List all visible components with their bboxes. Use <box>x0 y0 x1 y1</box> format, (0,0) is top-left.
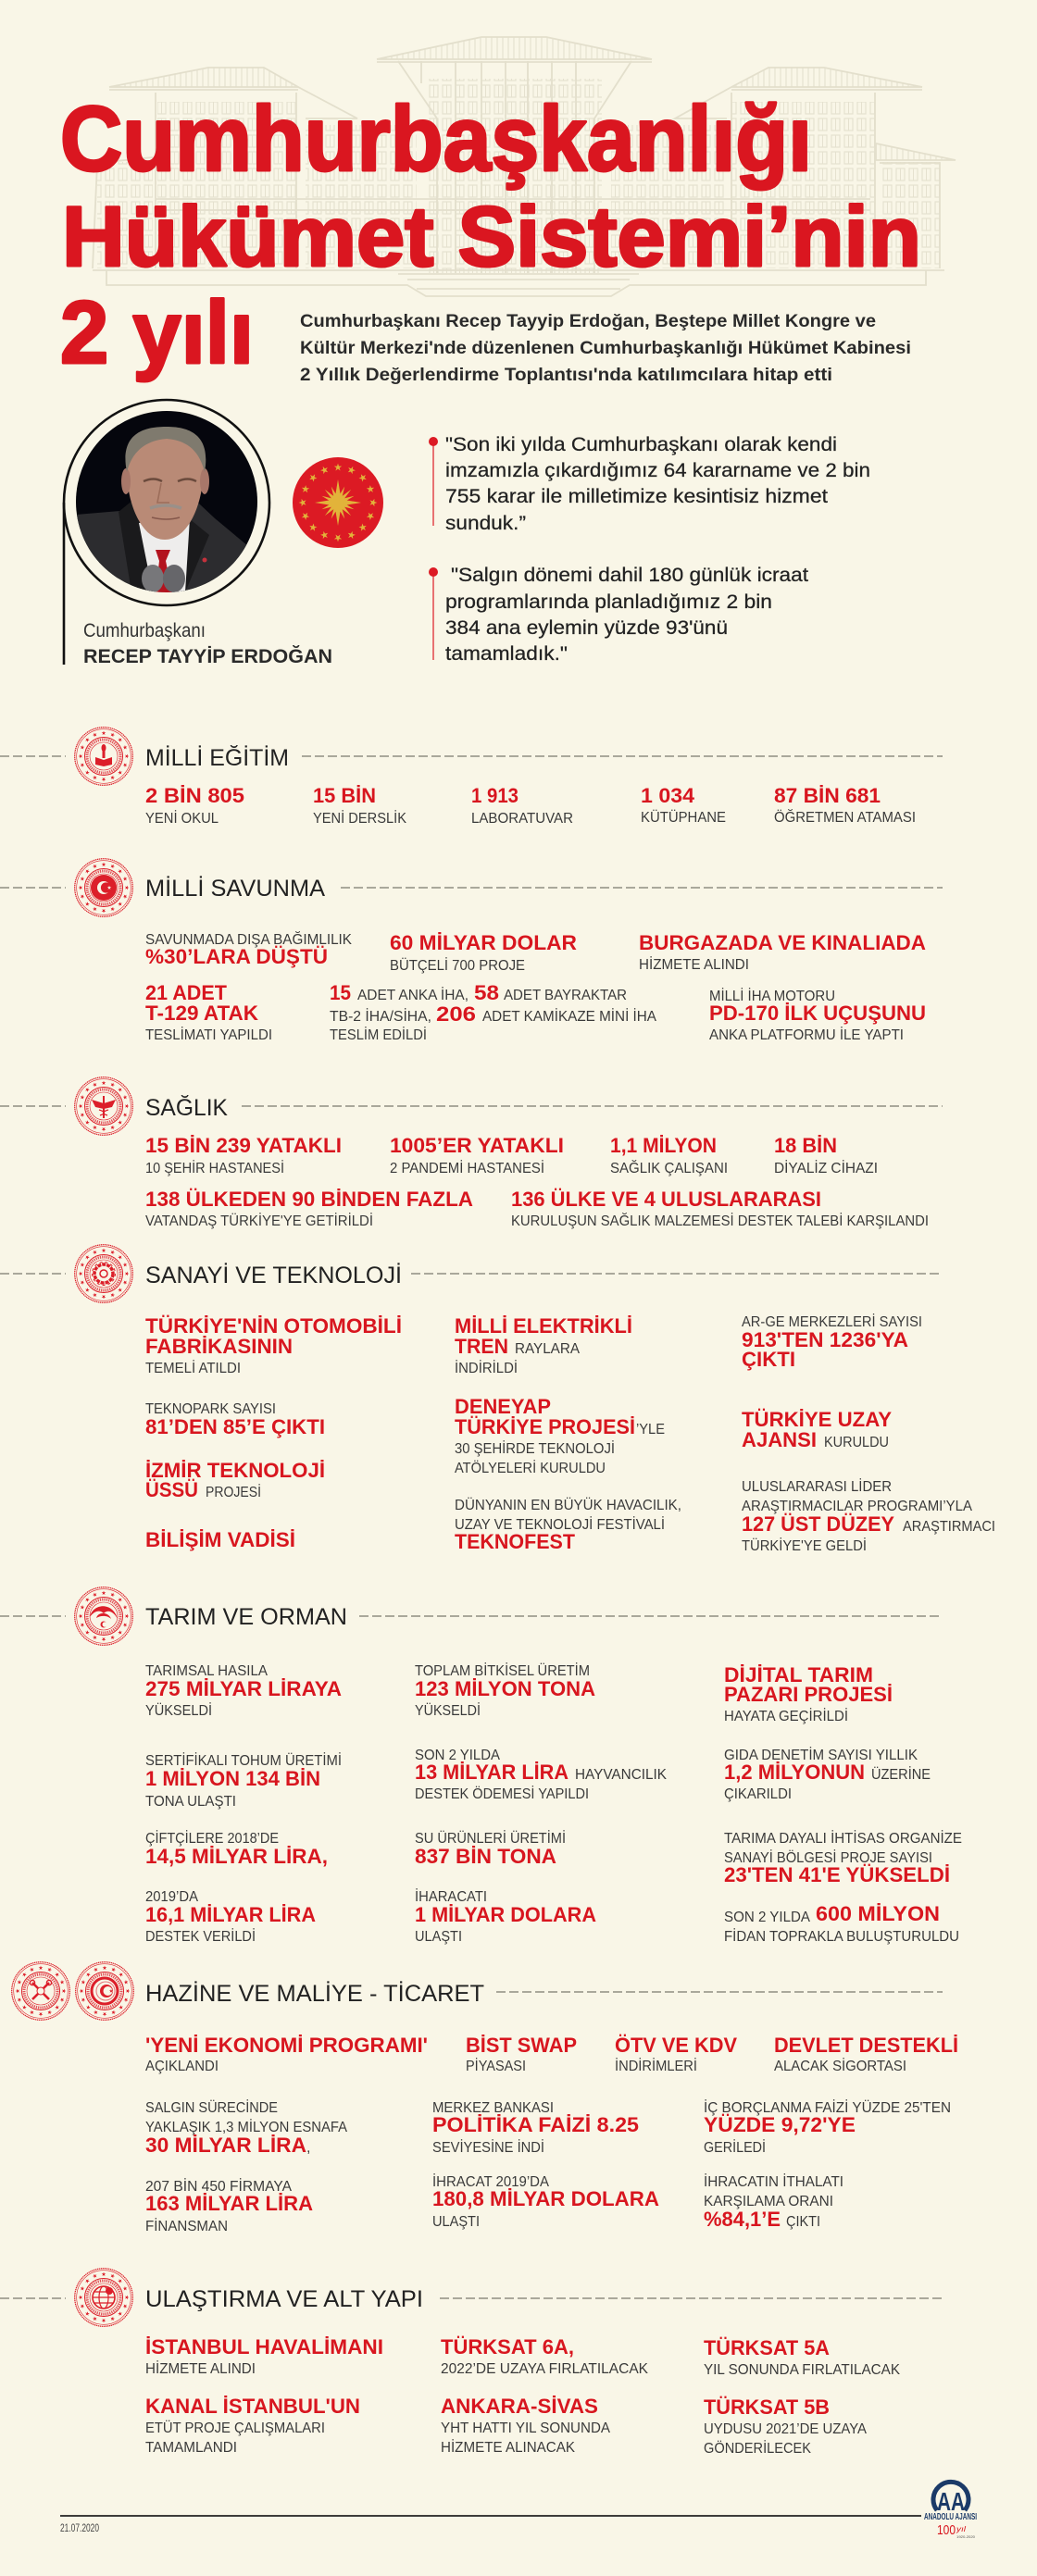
item: crop production <box>415 1661 595 1719</box>
footer rule <box>60 2515 921 2517</box>
item: space agency: KURULDU <box>824 1435 889 1450</box>
item: exports: 180,8 MİLYAR DOLARA <box>432 2187 659 2210</box>
item: fishery export: İHARACATI <box>415 1887 487 1905</box>
item: electric train: TREN <box>455 1335 508 1358</box>
item: researchers: ULUSLARARASI LİDER <box>742 1477 892 1495</box>
item: economy programme: 'YENİ EKONOMİ PROGRAMI' <box>145 2034 428 2057</box>
item: electric train: İNDİRİLDİ <box>455 1359 518 1376</box>
item: policy rate: SEVİYESİNE İNDİ <box>432 2138 544 2156</box>
item: livestock support: DESTEK ÖDEMESİ YAPILDI <box>415 1785 589 1802</box>
stat: laboratories: 1 913 <box>471 784 518 807</box>
stat: medical supplies <box>511 1188 929 1229</box>
logo: anadolu ajansı: 1920-2020 <box>956 2534 976 2539</box>
icon: industry ministry seal <box>75 1245 132 1302</box>
item: researchers: TÜRKİYE'YE GELDİ <box>742 1537 867 1554</box>
heading: ULAŞTIRMA VE ALT YAPI <box>145 2286 423 2312</box>
stat: 60 billion: BÜTÇELİ 700 PROJE <box>390 956 525 974</box>
stat: drones: ADET ANKA İHA, <box>357 986 469 1003</box>
item: credit insurance: ALACAK SİGORTASI <box>774 2057 906 2074</box>
stat: engine: MİLLİ İHA MOTORU <box>709 987 835 1004</box>
quote one: 755 karar ile milletimize kesintisiz hizmet <box>445 486 828 507</box>
stat: city hospitals <box>145 1134 342 1176</box>
item: organized zones: SANAYİ BÖLGESİ PROJE SAYISI <box>724 1848 932 1866</box>
item: tradesmen support: YAKLAŞIK 1,3 MİLYON ESNAFA <box>145 2118 347 2135</box>
item: exports: İHRACAT 2019’DA <box>432 2172 549 2190</box>
item: türksat 5b: UYDUSU 2021’DE UZAYA <box>704 2421 867 2437</box>
item: fishery export <box>415 1887 596 1945</box>
item: ankara-sivas: HİZMETE ALINACAK <box>441 2438 575 2456</box>
item: borrowing rate <box>704 2098 951 2156</box>
item: canal: KANAL İSTANBUL'UN <box>145 2395 360 2418</box>
item: exports <box>432 2172 659 2230</box>
item: saplings: SON 2 YILDA <box>724 1910 810 1925</box>
item: türksat 5a: TÜRKSAT 5A <box>704 2336 830 2359</box>
item: deneyap: ’YLE <box>636 1422 665 1437</box>
item: izmir base: ÜSSÜ <box>145 1478 198 1501</box>
date: 21.07.2020 <box>60 2521 99 2534</box>
quote two: "Salgın dönemi dahil 180 günlük icraat <box>451 565 808 586</box>
stat: pandemic hospitals: 1005’ER YATAKLI <box>390 1134 564 1157</box>
item: exports: ULAŞTI <box>432 2214 480 2230</box>
item: organized zones <box>724 1829 962 1886</box>
stat: laboratories: LABORATUVAR <box>471 811 573 827</box>
item: technoparks <box>145 1401 325 1438</box>
stat: teachers <box>774 784 916 826</box>
portrait of the president <box>64 400 269 665</box>
item: tradesmen support: SALGIN SÜRECİNDE <box>145 2098 278 2116</box>
stat: citizens returned <box>145 1188 473 1229</box>
item: livestock support: HAYVANCILIK <box>575 1767 667 1783</box>
president name <box>83 620 332 667</box>
item: airport <box>145 2335 383 2377</box>
item: fishery export: 1 MİLYAR DOLARA <box>415 1903 596 1926</box>
panel: hazine ve maliye - ticaret <box>12 1962 958 2234</box>
item: swap: BİST SWAP <box>466 2034 577 2057</box>
item: fishery production: 837 BİN TONA <box>415 1845 556 1868</box>
item: farmer support 2019: 16,1 MİLYAR LİRA <box>145 1903 316 1926</box>
item: seeds: SERTİFİKALI TOHUM ÜRETİMİ <box>145 1751 342 1769</box>
stat: t-129: 21 ADET <box>145 981 228 1004</box>
item: saplings: 600 MİLYON <box>816 1902 940 1925</box>
logo: anadolu ajansı: yıl <box>956 2525 966 2533</box>
title: Hükümet Sistemi’nin <box>62 190 921 284</box>
item: farmer support 2019: DESTEK VERİLDİ <box>145 1927 256 1945</box>
item: food inspections <box>724 1746 931 1802</box>
icon: transport ministry seal <box>75 2269 132 2326</box>
item: export coverage: KARŞILAMA ORANI <box>704 2194 833 2209</box>
icon: presidential seal <box>293 457 383 548</box>
item: technoparks: TEKNOPARK SAYISI <box>145 1401 276 1417</box>
item: firm financing: 163 MİLYAR LİRA <box>145 2192 313 2215</box>
item: economy programme <box>145 2034 428 2074</box>
panel: milli savunma <box>0 859 943 1043</box>
stat: dialysis: DİYALİZ CİHAZI <box>774 1159 878 1176</box>
item: policy rate <box>432 2100 639 2156</box>
stat: engine: ANKA PLATFORMU İLE YAPTI <box>709 1026 904 1043</box>
item: organized zones: TARIMA DAYALI İHTİSAS ORGANİZE <box>724 1829 962 1847</box>
item: firm financing: 207 BİN 450 FİRMAYA <box>145 2177 292 2195</box>
item: food inspections: ÜZERİNE <box>871 1765 931 1783</box>
item: electric train: MİLLİ ELEKTRİKLİ <box>455 1314 632 1338</box>
item: crop production: 123 MİLYON TONA <box>415 1677 595 1700</box>
quote one: sunduk.” <box>445 513 526 534</box>
subtitle text <box>300 312 911 385</box>
item: livestock support <box>415 1748 667 1802</box>
item: digital market <box>724 1663 893 1724</box>
stat: drones: 58 <box>474 981 499 1004</box>
item: farmer support 2019: 2019’DA <box>145 1889 198 1905</box>
item: car factory <box>145 1314 402 1376</box>
item: researchers: ARAŞTIRMACI <box>903 1519 995 1535</box>
item: ankara-sivas: ANKARA-SİVAS <box>441 2395 598 2418</box>
quote one: "Son iki yılda Cumhurbaşkanı olarak kendi <box>445 434 837 455</box>
stat: drones: 15 <box>330 981 351 1004</box>
item: borrowing rate: İÇ BORÇLANMA FAİZİ YÜZDE 25'TEN <box>704 2098 951 2116</box>
item: izmir base: İZMİR TEKNOLOJİ <box>145 1459 325 1482</box>
item: export coverage <box>704 2172 843 2231</box>
item: teknofest: TEKNOFEST <box>455 1530 576 1553</box>
item: deneyap: 30 ŞEHİRDE TEKNOLOJİ <box>455 1439 615 1457</box>
item: canal: ETÜT PROJE ÇALIŞMALARI <box>145 2420 325 2436</box>
item: economy programme: AÇIKLANDI <box>145 2059 219 2074</box>
item: türksat 6a: 2022’DE UZAYA FIRLATILACAK <box>441 2361 648 2377</box>
stat: drones: TB-2 İHA/SİHA, <box>330 1007 431 1025</box>
panel: ulaştırma ve alt yapı <box>0 2269 943 2457</box>
item: türksat 6a <box>441 2335 648 2377</box>
quote one <box>429 434 870 534</box>
stat: libraries <box>641 784 726 826</box>
stat: ships: BURGAZADA VE KINALIADA <box>639 931 926 954</box>
president name: RECEP TAYYİP ERDOĞAN <box>83 645 332 667</box>
panel: milli eğitim <box>0 728 943 827</box>
item: izmir base <box>145 1459 325 1501</box>
item: airport: HİZMETE ALINDI <box>145 2359 256 2377</box>
item: deneyap: DENEYAP <box>455 1395 551 1418</box>
item: digital market: DİJİTAL TARIM <box>724 1663 873 1686</box>
stat: new schools <box>145 784 244 827</box>
item: fishery production: SU ÜRÜNLERİ ÜRETİMİ <box>415 1829 566 1847</box>
logo: anadolu ajansı: AA <box>937 2487 965 2516</box>
illustration: presidential complex building <box>93 37 956 296</box>
title: 2 yılı <box>60 283 254 382</box>
stat: t-129 <box>145 981 272 1043</box>
item: researchers <box>742 1477 995 1554</box>
icon: trade ministry seal <box>76 1962 133 2020</box>
item: revenue: 275 MİLYAR LİRAYA <box>145 1677 342 1700</box>
stat: health workers: SAĞLIK ÇALIŞANI <box>610 1159 728 1176</box>
item: tax cuts: ÖTV VE KDV <box>615 2034 737 2057</box>
stat: dialysis <box>774 1134 878 1176</box>
item: farmer support 2018: ÇİFTÇİLERE 2018’DE <box>145 1829 279 1847</box>
icon: treasury ministry seal <box>12 1962 69 2020</box>
item: crop production: TOPLAM BİTKİSEL ÜRETİM <box>415 1661 590 1679</box>
item: swap <box>466 2034 577 2074</box>
item: airport: İSTANBUL HAVALİMANI <box>145 2335 383 2358</box>
stat: dialysis: 18 BİN <box>774 1134 837 1157</box>
item: türksat 5a <box>704 2336 900 2378</box>
item: tradesmen support <box>145 2098 347 2157</box>
item: seeds: 1 MİLYON 134 BİN <box>145 1767 320 1790</box>
stat: dependence: SAVUNMADA DIŞA BAĞIMLILIK <box>145 930 352 948</box>
heading: TARIM VE ORMAN <box>145 1604 347 1630</box>
item: export coverage: ÇIKTI <box>786 2214 820 2230</box>
item: digital market: PAZARI PROJESİ <box>724 1683 893 1706</box>
item: deneyap: ATÖLYELERİ KURULDU <box>455 1459 606 1476</box>
stat: engine <box>709 987 926 1043</box>
item: livestock support: 13 MİLYAR LİRA <box>415 1761 568 1784</box>
item: space agency: TÜRKİYE UZAY <box>742 1408 892 1431</box>
item: technoparks: 81’DEN 85’E ÇIKTI <box>145 1415 325 1438</box>
stat: medical supplies: 136 ÜLKE VE 4 ULUSLARARASI <box>511 1188 821 1211</box>
heading: SANAYİ VE TEKNOLOJİ <box>145 1262 402 1288</box>
item: food inspections: ÇIKARILDI <box>724 1786 792 1802</box>
item: teknofest <box>455 1497 681 1553</box>
stat: dependence: %30’LARA DÜŞTÜ <box>145 945 328 968</box>
item: export coverage: İHRACATIN İTHALATI <box>704 2172 843 2190</box>
item: canal <box>145 2395 360 2456</box>
item: deneyap <box>455 1395 665 1476</box>
item: fishery production <box>415 1829 566 1868</box>
item: car factory: TÜRKİYE'NİN OTOMOBİLİ <box>145 1314 402 1338</box>
stat: drones: ADET BAYRAKTAR <box>504 988 627 1003</box>
item: saplings: FİDAN TOPRAKLA BULUŞTURULDU <box>724 1927 959 1945</box>
panel: tarım ve orman <box>0 1587 962 1945</box>
item: tax cuts <box>615 2034 737 2074</box>
stat: dependence <box>145 930 352 968</box>
item: firm financing <box>145 2177 313 2234</box>
logo: anadolu ajansı: ANADOLU AJANSI <box>924 2512 977 2522</box>
item: r and d centers: ÇIKTI <box>742 1348 795 1371</box>
icon: agriculture ministry seal <box>75 1587 132 1645</box>
panel: sanayi ve teknoloji <box>0 1245 995 1554</box>
stat: pandemic hospitals: 2 PANDEMİ HASTANESİ <box>390 1159 544 1176</box>
stat: ships <box>639 931 926 973</box>
stat: teachers: 87 BİN 681 <box>774 784 881 807</box>
item: teknofest: DÜNYANIN EN BÜYÜK HAVACILIK, <box>455 1497 681 1513</box>
item: space agency: AJANSI <box>742 1428 817 1451</box>
stat: 60 billion: 60 MİLYAR DOLAR <box>390 931 577 954</box>
item: swap: PİYASASI <box>466 2057 526 2074</box>
stat: laboratories <box>471 784 573 827</box>
item: r and d centers: AR-GE MERKEZLERİ SAYISI <box>742 1313 922 1330</box>
stat: citizens returned: 138 ÜLKEDEN 90 BİNDEN FAZLA <box>145 1188 473 1211</box>
stat: new schools: 2 BİN 805 <box>145 784 244 807</box>
stat: drones: 206 <box>436 1002 476 1026</box>
item: credit insurance <box>774 2034 958 2074</box>
item: tradesmen support: , <box>306 2140 310 2156</box>
stat: ships: HİZMETE ALINDI <box>639 955 749 973</box>
item: car factory: FABRİKASININ <box>145 1335 293 1358</box>
item: export coverage: %84,1’E <box>704 2208 781 2231</box>
quote two: programlarında planladığımız 2 bin <box>445 591 772 613</box>
item: livestock support: SON 2 YILDA <box>415 1748 500 1763</box>
heading: SAĞLIK <box>145 1094 228 1121</box>
item: food inspections: GIDA DENETİM SAYISI YILLIK <box>724 1746 918 1763</box>
item: farmer support 2018 <box>145 1829 328 1868</box>
title <box>60 87 921 382</box>
heading: MİLLİ EĞİTİM <box>145 744 289 771</box>
quote two: 384 ana eylemin yüzde 93'ünü <box>445 617 728 639</box>
quote one: imzamızla çıkardığımız 64 kararname ve 2 bin <box>445 460 870 481</box>
item: electric train: RAYLARA <box>515 1341 580 1357</box>
item: researchers: ARAŞTIRMACILAR PROGRAMI’YLA <box>742 1499 972 1514</box>
item: space agency <box>742 1408 892 1451</box>
item: revenue: YÜKSELDİ <box>145 1701 212 1719</box>
stat: medical supplies: KURULUŞUN SAĞLIK MALZEMESİ DESTEK TALEBİ KARŞILANDI <box>511 1212 929 1229</box>
president name: Cumhurbaşkanı <box>83 620 206 641</box>
item: revenue: TARIMSAL HASILA <box>145 1663 268 1679</box>
stat: engine: PD-170 İLK UÇUŞUNU <box>709 1002 926 1025</box>
item: revenue <box>145 1663 342 1719</box>
item: türksat 5b: TÜRKSAT 5B <box>704 2396 830 2419</box>
item: borrowing rate: YÜZDE 9,72'YE <box>704 2113 856 2136</box>
item: seeds <box>145 1751 342 1810</box>
title: Cumhurbaşkanlığı <box>60 87 812 190</box>
stat: t-129: TESLİMATI YAPILDI <box>145 1026 272 1043</box>
icon: defence ministry seal <box>75 859 132 916</box>
stat: new schools: YENİ OKUL <box>145 809 219 827</box>
item: policy rate: MERKEZ BANKASI <box>432 2100 554 2116</box>
stat: health workers: 1,1 MİLYON <box>610 1134 717 1157</box>
item: izmir base: PROJESİ <box>206 1483 261 1500</box>
stat: new classrooms <box>313 784 406 827</box>
item: ankara-sivas <box>441 2395 610 2456</box>
stat: city hospitals: 10 ŞEHİR HASTANESİ <box>145 1159 284 1176</box>
stat: libraries: KÜTÜPHANE <box>641 809 726 826</box>
stat: drones: ADET KAMİKAZE MİNİ İHA <box>482 1007 656 1025</box>
heading: MİLLİ SAVUNMA <box>145 875 325 902</box>
stat: libraries: 1 034 <box>641 784 695 807</box>
item: farmer support 2019 <box>145 1889 316 1945</box>
item: seeds: TONA ULAŞTI <box>145 1794 236 1810</box>
item: r and d centers: 913'TEN 1236'YA <box>742 1328 908 1351</box>
heading: HAZİNE VE MALİYE - TİCARET <box>145 1980 484 2007</box>
item: organized zones: 23'TEN 41'E YÜKSELDİ <box>724 1863 950 1886</box>
item: car factory: TEMELİ ATILDI <box>145 1359 241 1376</box>
stat: t-129: T-129 ATAK <box>145 1002 258 1025</box>
stat: city hospitals: 15 BİN 239 YATAKLI <box>145 1134 342 1157</box>
item: tax cuts: İNDİRİMLERİ <box>615 2057 697 2074</box>
stat: new classrooms: YENİ DERSLİK <box>313 809 406 827</box>
item: canal: TAMAMLANDI <box>145 2440 237 2456</box>
item: fishery export: ULAŞTI <box>415 1929 462 1945</box>
panel: sağlık <box>0 1077 943 1229</box>
stat: drones <box>330 981 656 1043</box>
item: policy rate: POLİTİKA FAİZİ 8.25 <box>432 2113 639 2136</box>
item: deneyap: TÜRKİYE PROJESİ <box>455 1415 635 1438</box>
item: r and d centers <box>742 1313 922 1371</box>
item: borrowing rate: GERİLEDİ <box>704 2138 766 2156</box>
item: türksat 5a: YIL SONUNDA FIRLATILACAK <box>704 2362 900 2378</box>
item: electric train <box>455 1314 632 1376</box>
item: it valley: BİLİŞİM VADİSİ <box>145 1528 295 1551</box>
item: food inspections: 1,2 MİLYONUN <box>724 1761 865 1784</box>
item: researchers: 127 ÜST DÜZEY <box>742 1512 894 1536</box>
stat: teachers: ÖĞRETMEN ATAMASI <box>774 808 916 826</box>
subtitle text: 2 Yıllık Değerlendirme Toplantısı'nda katılımcılara hitap etti <box>300 366 832 385</box>
item: firm financing: FİNANSMAN <box>145 2217 228 2234</box>
icon: health ministry seal <box>75 1077 132 1135</box>
subtitle text: Cumhurbaşkanı Recep Tayyip Erdoğan, Beştepe Millet Kongre ve <box>300 312 876 331</box>
quote two: tamamladık." <box>445 643 568 665</box>
icon: education ministry seal <box>75 728 132 785</box>
item: farmer support 2018: 14,5 MİLYAR LİRA, <box>145 1845 328 1868</box>
item: türksat 6a: TÜRKSAT 6A, <box>441 2335 574 2358</box>
item: digital market: HAYATA GEÇİRİLDİ <box>724 1707 848 1724</box>
item: credit insurance: DEVLET DESTEKLİ <box>774 2034 958 2057</box>
stat: 60 billion <box>390 931 577 974</box>
stat: pandemic hospitals <box>390 1134 564 1176</box>
item: crop production: YÜKSELDİ <box>415 1701 481 1719</box>
item: türksat 5b <box>704 2396 867 2457</box>
item: ankara-sivas: YHT HATTI YIL SONUNDA <box>441 2420 610 2436</box>
stat: drones: TESLİM EDİLDİ <box>330 1026 427 1043</box>
logo: anadolu ajansı <box>924 2482 977 2539</box>
stat: health workers <box>610 1134 728 1176</box>
item: teknofest: UZAY VE TEKNOLOJİ FESTİVALİ <box>455 1515 665 1533</box>
item: türksat 5b: GÖNDERİLECEK <box>704 2439 811 2457</box>
subtitle text: Kültür Merkezi'nde düzenlenen Cumhurbaşkanlığı Hükümet Kabinesi <box>300 339 911 358</box>
stat: citizens returned: VATANDAŞ TÜRKİYE'YE GETİRİLDİ <box>145 1212 373 1229</box>
item: saplings <box>724 1902 959 1945</box>
logo: anadolu ajansı: 100 <box>937 2522 956 2538</box>
stat: new classrooms: 15 BİN <box>313 784 376 807</box>
quote two <box>429 565 808 665</box>
item: tradesmen support: 30 MİLYAR LİRA <box>145 2134 306 2157</box>
